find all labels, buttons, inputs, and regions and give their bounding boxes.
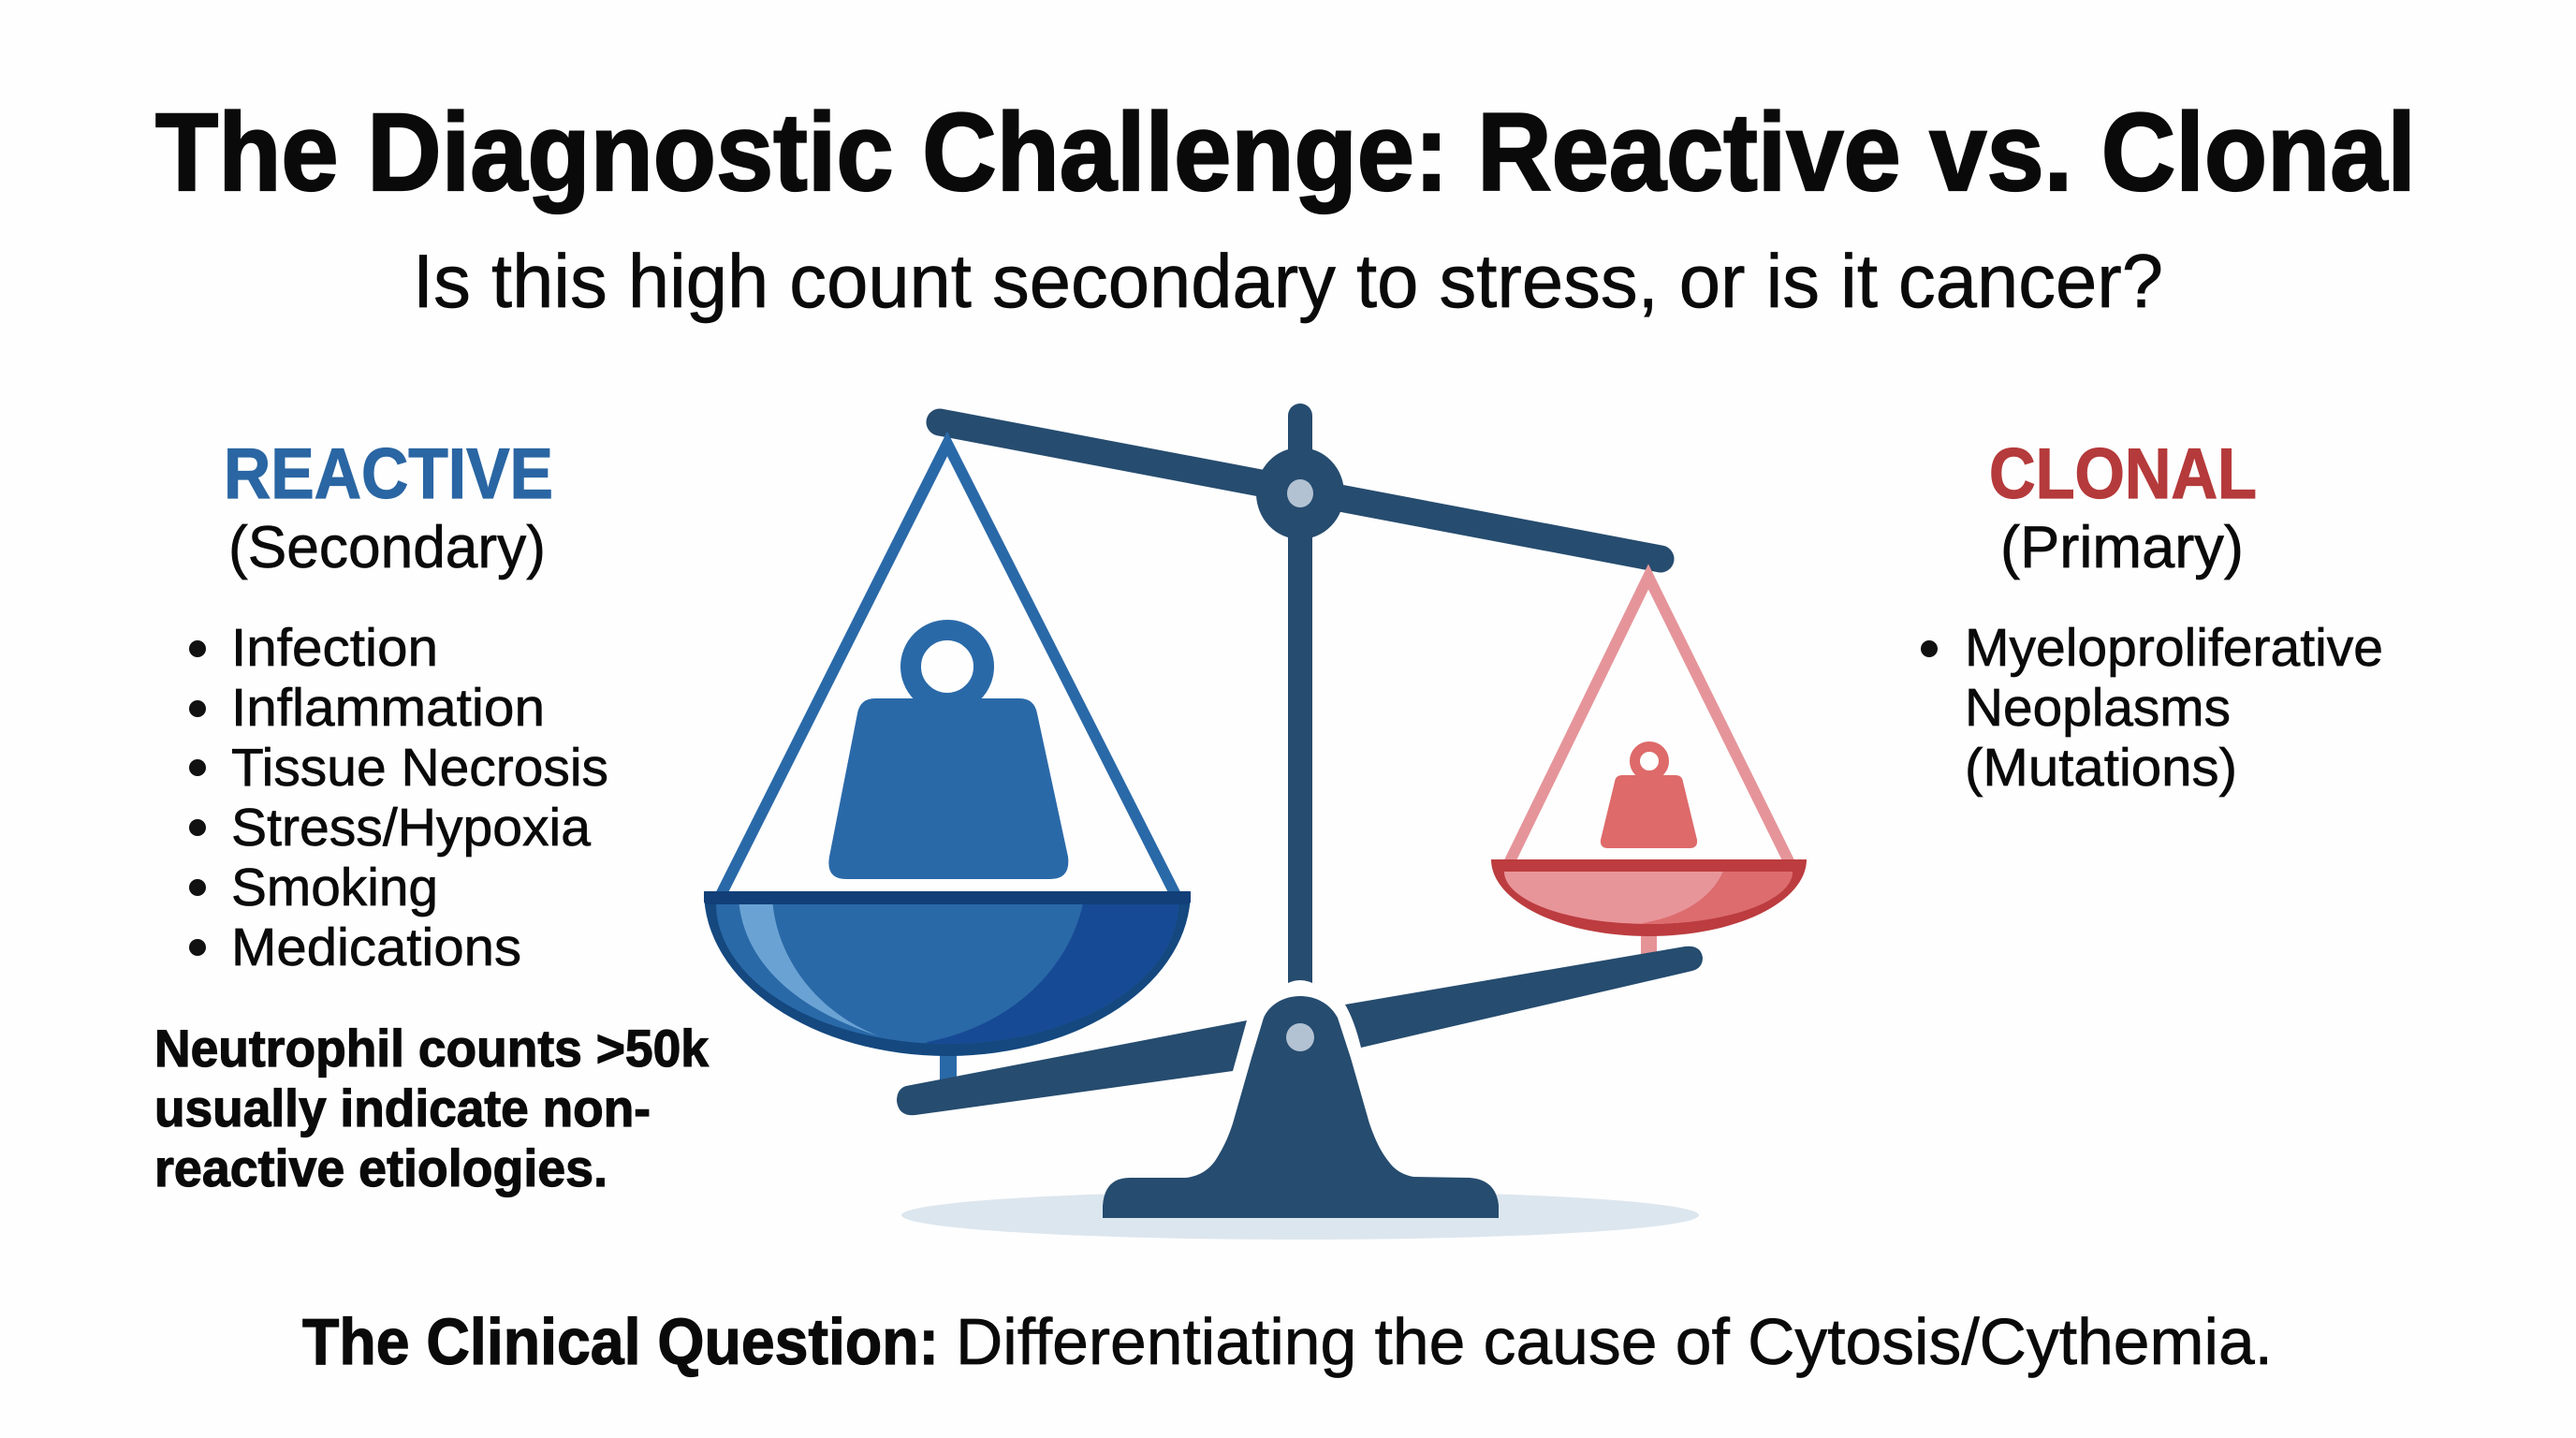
pivot hole <box>1287 479 1313 507</box>
blue stem <box>940 1049 957 1088</box>
callout: neutrophil counts: usually indicate non- <box>154 1078 651 1137</box>
callout: neutrophil counts <box>154 1019 710 1197</box>
red pan <box>1491 859 1807 936</box>
list: reactive causes: Stress/Hypoxia <box>231 798 591 858</box>
base <box>1103 996 1499 1218</box>
callout: neutrophil counts: reactive etiologies. <box>154 1138 607 1197</box>
heading: reactive: REACTIVE <box>224 434 553 514</box>
list: reactive causes <box>189 618 608 977</box>
blue pan <box>704 891 1198 1058</box>
subheading: secondary: (Secondary) <box>228 515 546 580</box>
list: clonal causes <box>1921 618 2383 798</box>
red stem <box>1641 932 1657 956</box>
callout: neutrophil counts: Neutrophil counts >50k <box>154 1019 710 1078</box>
top beam <box>940 422 1661 559</box>
list: clonal causes: Myeloproliferative <box>1965 618 2383 678</box>
footer: clinical question: The Clinical Question: <box>302 1305 939 1378</box>
red pan strings <box>1509 577 1790 863</box>
list: clonal causes: Neoplasms <box>1965 678 2231 738</box>
pivot hub <box>1256 448 1344 539</box>
title: The Diagnostic Challenge: Reactive vs. Clonal <box>155 91 2416 214</box>
footer: clinical question <box>302 1305 2273 1378</box>
subheading: primary: (Primary) <box>2000 515 2244 580</box>
post <box>1288 404 1312 983</box>
list: reactive causes: Smoking <box>231 858 438 917</box>
illustration: balance scale <box>704 404 1807 1240</box>
list: clonal causes: (Mutations) <box>1965 738 2237 798</box>
subtitle: Is this high count secondary to stress, or is it cancer? <box>413 240 2163 324</box>
heavy blue weight <box>828 630 1068 879</box>
list: reactive causes: Infection <box>231 618 438 678</box>
blue pan strings <box>720 444 1177 897</box>
lower beam <box>897 946 1703 1115</box>
list: reactive causes: Medications <box>231 917 521 977</box>
base pivot hole <box>1286 1023 1314 1051</box>
ground shadow <box>901 1191 1699 1240</box>
light red weight <box>1601 747 1697 848</box>
list: reactive causes: Inflammation <box>231 678 545 738</box>
footer: clinical question: Differentiating the cause of Cytosis/Cythemia. <box>956 1305 2273 1378</box>
heading: clonal: CLONAL <box>1989 434 2257 514</box>
list: reactive causes: Tissue Necrosis <box>231 738 608 798</box>
panel: clonal causes <box>1921 434 2383 798</box>
panel: reactive causes <box>154 434 710 1197</box>
